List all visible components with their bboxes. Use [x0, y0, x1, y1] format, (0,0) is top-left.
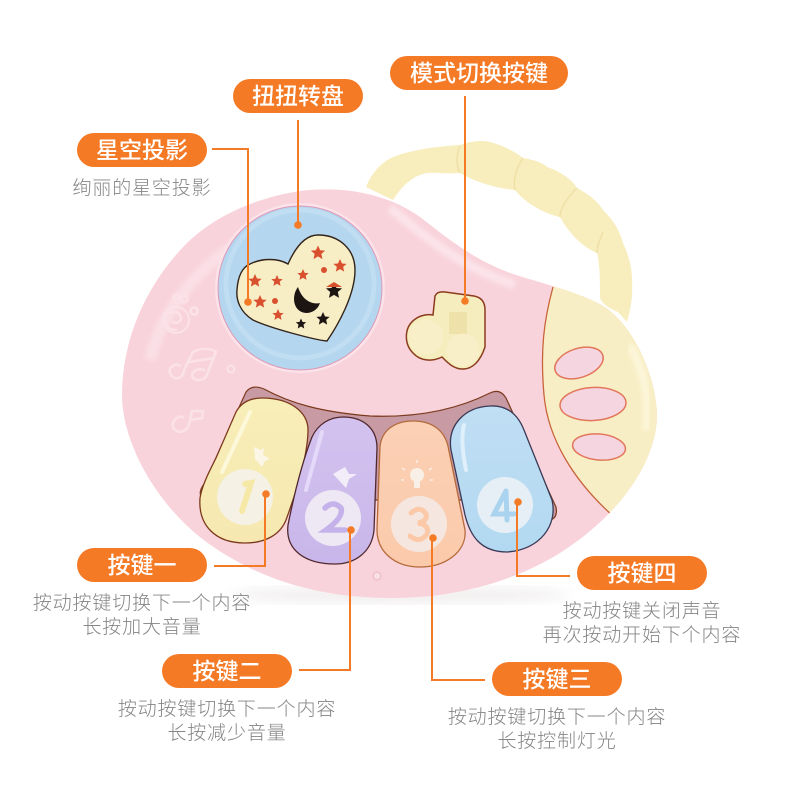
- callout: 按键三: 按键三: [522, 666, 592, 692]
- callout: 扭扭转盘: 扭扭转盘: [252, 83, 344, 109]
- callout: 按键三: 按动按键切换下一个内容: [448, 706, 666, 728]
- key 3: [377, 421, 465, 567]
- callout: 按键一: 按动按键切换下一个内容: [33, 592, 251, 614]
- callout: 按键二: 按键二: [192, 658, 262, 684]
- cream side panel: [150, 208, 690, 516]
- handle: [366, 141, 632, 322]
- callout: 按键二: 长按减少音量: [167, 722, 287, 744]
- callout: 按键四: 再次按动开始下个内容: [543, 624, 741, 646]
- music note button: [406, 292, 485, 369]
- side oval buttons: [551, 341, 627, 462]
- callout: 星空投影: 绚丽的星空投影: [73, 177, 211, 199]
- callout: 按键三: [429, 534, 666, 752]
- callout: 按键一: 长按加大音量: [82, 616, 202, 638]
- callout: 星空投影: 星空投影: [96, 137, 188, 163]
- callout: 按键四: [514, 498, 741, 646]
- hole: [373, 572, 381, 580]
- callout: 按键二: [118, 526, 355, 744]
- dial: [215, 203, 385, 373]
- heart: [237, 235, 355, 341]
- embossed icons: [163, 294, 234, 432]
- key 1: [200, 398, 308, 543]
- floor shadow: [230, 587, 570, 603]
- toy piano: [122, 141, 690, 603]
- key 4: [450, 406, 553, 552]
- key cavity: [200, 387, 556, 520]
- callout: 按键一: [33, 490, 270, 638]
- stars: [248, 246, 347, 320]
- key 2: [288, 417, 377, 564]
- callout: 按键三: 长按控制灯光: [497, 730, 617, 752]
- body: [122, 189, 657, 598]
- callout: 按键二: 按动按键切换下一个内容: [118, 698, 336, 720]
- callout: 按键四: 按动按键关闭声音: [563, 600, 721, 622]
- callout: 扭扭转盘: [233, 79, 363, 229]
- callout: 模式切换按键: 模式切换按键: [410, 60, 548, 86]
- callout: 按键一: 按键一: [108, 552, 176, 578]
- callout: 星空投影: [73, 133, 252, 306]
- callout: 模式切换按键: [390, 56, 568, 305]
- callout: 按键四: 按键四: [608, 560, 676, 586]
